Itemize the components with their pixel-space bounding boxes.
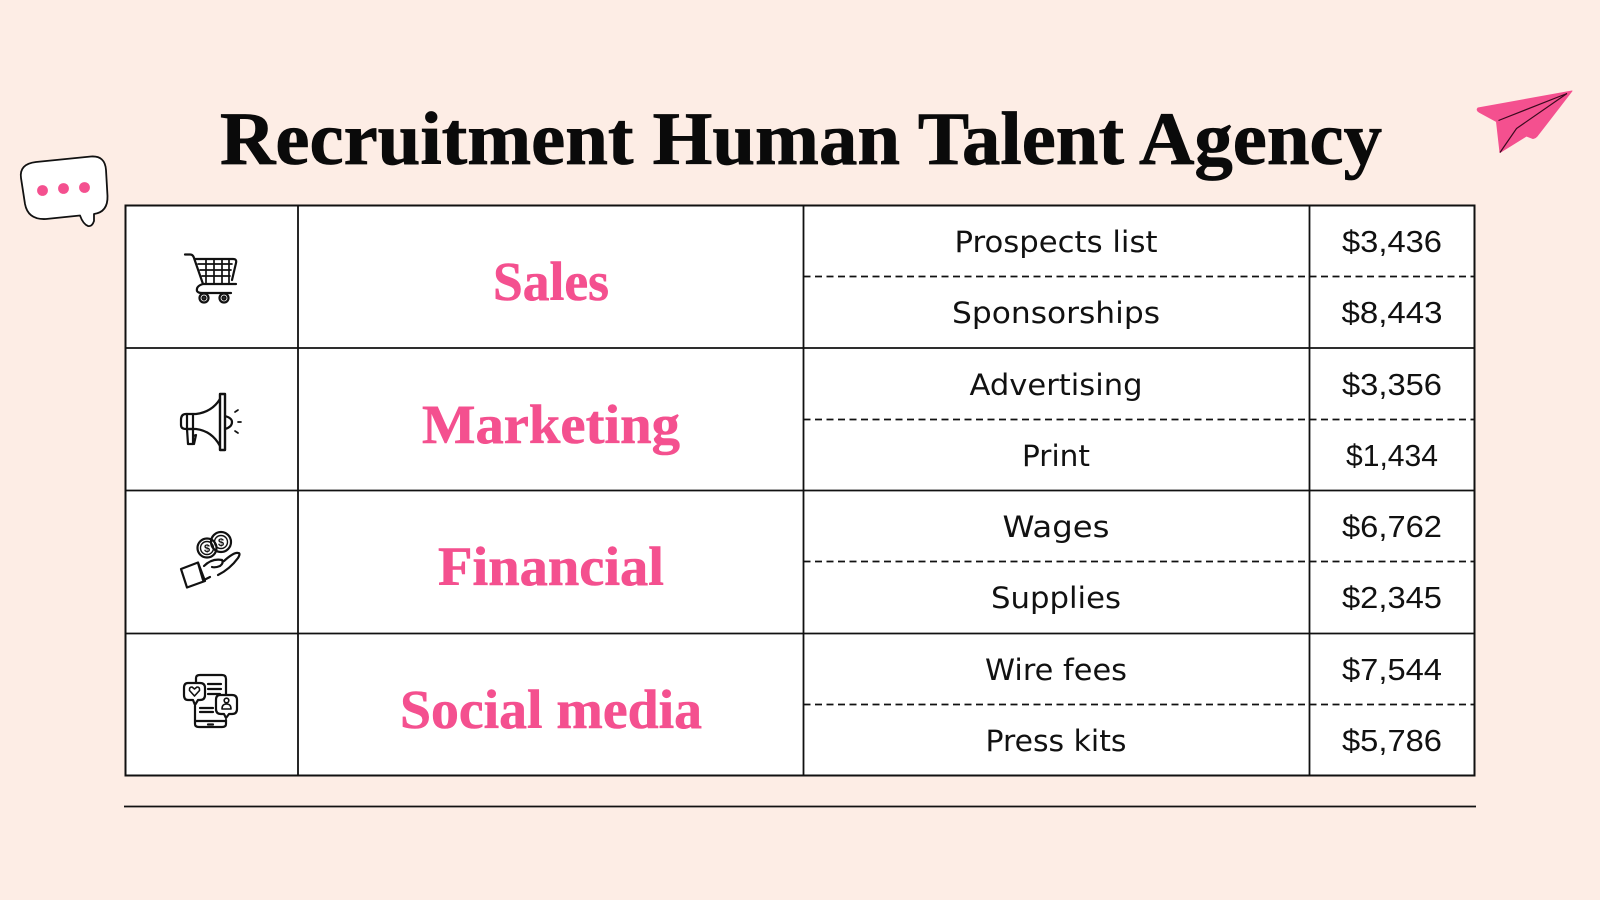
- icon: hand with coins: [181, 532, 240, 588]
- icon: speech bubble: [21, 156, 108, 226]
- item: Print: Print: [1022, 439, 1090, 473]
- title: Recruitment Human Talent Agency: [220, 98, 1382, 181]
- value: $7,544: $7,544: [1342, 652, 1442, 687]
- icon: shopping cart: [185, 254, 236, 302]
- category: Social media: Social media: [400, 679, 702, 740]
- category: Financial: Financial: [438, 536, 664, 597]
- item: Press kits: Press kits: [986, 724, 1126, 758]
- item: Advertising: Advertising: [970, 368, 1142, 402]
- row: Sales: [185, 224, 1442, 330]
- value: $5,786: $5,786: [1342, 723, 1442, 758]
- table: [126, 206, 1474, 776]
- row: Social media: [184, 652, 1442, 758]
- value: $3,356: $3,356: [1342, 367, 1442, 402]
- icon: hand with coins: $: [204, 543, 210, 555]
- icon: hand with coins: $: [218, 537, 224, 549]
- category: Marketing: Marketing: [422, 394, 680, 455]
- item: Supplies: Supplies: [991, 581, 1121, 615]
- item: Wages: Wages: [1002, 510, 1110, 544]
- icon: paper plane: [1477, 91, 1572, 152]
- table background and grid: [126, 206, 1474, 776]
- item: Wire fees: Wire fees: [985, 653, 1127, 687]
- value: $8,443: $8,443: [1342, 295, 1442, 330]
- item: Prospects list: Prospects list: [954, 225, 1158, 259]
- icon: megaphone: [181, 394, 241, 450]
- value: $1,434: $1,434: [1346, 438, 1438, 473]
- category: Sales: Sales: [493, 251, 609, 312]
- row: Financial: [181, 509, 1442, 615]
- row: Marketing: [181, 367, 1442, 473]
- item: Sponsorships: Sponsorships: [952, 296, 1160, 330]
- value: $6,762: $6,762: [1342, 509, 1442, 544]
- value: $2,345: $2,345: [1342, 580, 1442, 615]
- value: $3,436: $3,436: [1342, 224, 1442, 259]
- icon: phone with social bubbles: [184, 675, 237, 727]
